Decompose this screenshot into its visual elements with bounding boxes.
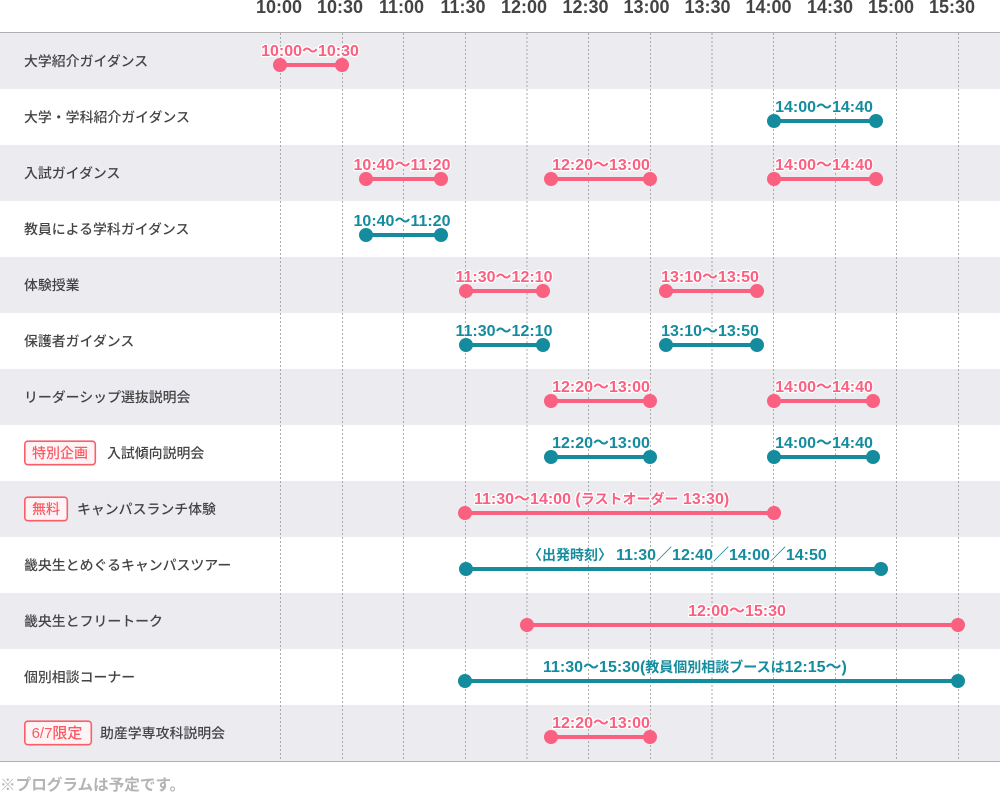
row 8: 特別企画 入試傾向説明会: 14:00〜14:40 — [775, 435, 873, 452]
row 6: 保護者ガイダンス: 11:30〜12:10 — [456, 323, 553, 340]
row 9: 無料 キャンパスランチ体験: 無料 — [32, 501, 60, 517]
row 5: 体験授業: 13:10〜13:50 — [661, 269, 759, 286]
row 12: 個別相談コーナー — [24, 659, 965, 688]
row 3: 入試ガイダンス — [24, 157, 883, 186]
row 12: 個別相談コーナー: 11:30〜15:30(教員個別相談ブースは12:15〜) — [543, 659, 847, 676]
row 2: 大学・学科紹介ガイダンス: 大学・学科紹介ガイダンス — [24, 109, 190, 125]
row 11: 畿央生とフリートーク: 12:00〜15:30 — [688, 603, 786, 620]
row 4: 教員による学科ガイダンス — [24, 213, 451, 242]
row 9: 無料 キャンパスランチ体験: キャンパスランチ体験 — [77, 501, 216, 517]
row 2: 大学・学科紹介ガイダンス: 14:00〜14:40 — [775, 99, 873, 116]
row 3: 入試ガイダンス: 14:00〜14:40 — [775, 157, 873, 174]
row 9: 無料 キャンパスランチ体験: 11:30〜14:00 (ラストオーダー 13:30) — [474, 491, 729, 508]
row 7: リーダーシップ選抜説明会: 14:00〜14:40 — [775, 379, 873, 396]
row 12: 個別相談コーナー: 個別相談コーナー — [24, 669, 135, 685]
row 3: 入試ガイダンス: 12:20〜13:00 — [552, 157, 650, 174]
row 2: 大学・学科紹介ガイダンス — [24, 99, 883, 128]
row 10: 畿央生とめぐるキャンパスツアー — [24, 546, 888, 576]
row 13: 6/7限定 助産学専攻科説明会 — [25, 715, 657, 745]
row 11: 畿央生とフリートーク — [24, 603, 965, 632]
row 3: 入試ガイダンス: 入試ガイダンス — [24, 165, 120, 181]
row 1: 大学紹介ガイダンス: 大学紹介ガイダンス — [24, 53, 148, 69]
row 3: 入試ガイダンス: 10:40〜11:20 — [354, 157, 451, 174]
row 5: 体験授業 — [24, 269, 764, 298]
row 6: 保護者ガイダンス: 保護者ガイダンス — [24, 333, 134, 349]
row 9: 無料 キャンパスランチ体験 — [25, 491, 781, 521]
row 4: 教員による学科ガイダンス: 教員による学科ガイダンス — [24, 221, 189, 237]
row 5: 体験授業: 11:30〜12:10 — [456, 269, 553, 286]
footnote: ※プログラムは予定です。 — [0, 775, 185, 794]
row 1: 大学紹介ガイダンス: 10:00〜10:30 — [261, 43, 359, 60]
row 7: リーダーシップ選抜説明会: リーダーシップ選抜説明会 — [24, 389, 191, 405]
row 13: 6/7限定 助産学専攻科説明会: 6/7限定 — [32, 725, 82, 742]
row 8: 特別企画 入試傾向説明会 — [25, 435, 880, 465]
row 13: 6/7限定 助産学専攻科説明会: 12:20〜13:00 — [552, 715, 650, 732]
row 8: 特別企画 入試傾向説明会: 入試傾向説明会 — [107, 445, 204, 461]
row 6: 保護者ガイダンス — [24, 323, 764, 352]
row 10: 畿央生とめぐるキャンパスツアー: 11:30／12:40／14:00／14:50 — [616, 546, 827, 564]
row 13: 6/7限定 助産学専攻科説明会: 助産学専攻科説明会 — [100, 725, 225, 741]
row 10: 畿央生とめぐるキャンパスツアー: 〈出発時刻〉 — [528, 547, 612, 563]
row 11: 畿央生とフリートーク: 畿央生とフリートーク — [24, 613, 163, 629]
row 10: 畿央生とめぐるキャンパスツアー: 畿央生とめぐるキャンパスツアー — [24, 557, 231, 573]
row 8: 特別企画 入試傾向説明会: 特別企画 — [32, 445, 88, 461]
row 7: リーダーシップ選抜説明会 — [24, 379, 880, 408]
row 5: 体験授業: 体験授業 — [24, 277, 80, 293]
row 8: 特別企画 入試傾向説明会: 12:20〜13:00 — [552, 435, 650, 452]
time axis header — [256, 0, 975, 17]
row 4: 教員による学科ガイダンス: 10:40〜11:20 — [354, 213, 451, 230]
row 1: 大学紹介ガイダンス — [24, 43, 359, 72]
row 6: 保護者ガイダンス: 13:10〜13:50 — [661, 323, 759, 340]
row 7: リーダーシップ選抜説明会: 12:20〜13:00 — [552, 379, 650, 396]
